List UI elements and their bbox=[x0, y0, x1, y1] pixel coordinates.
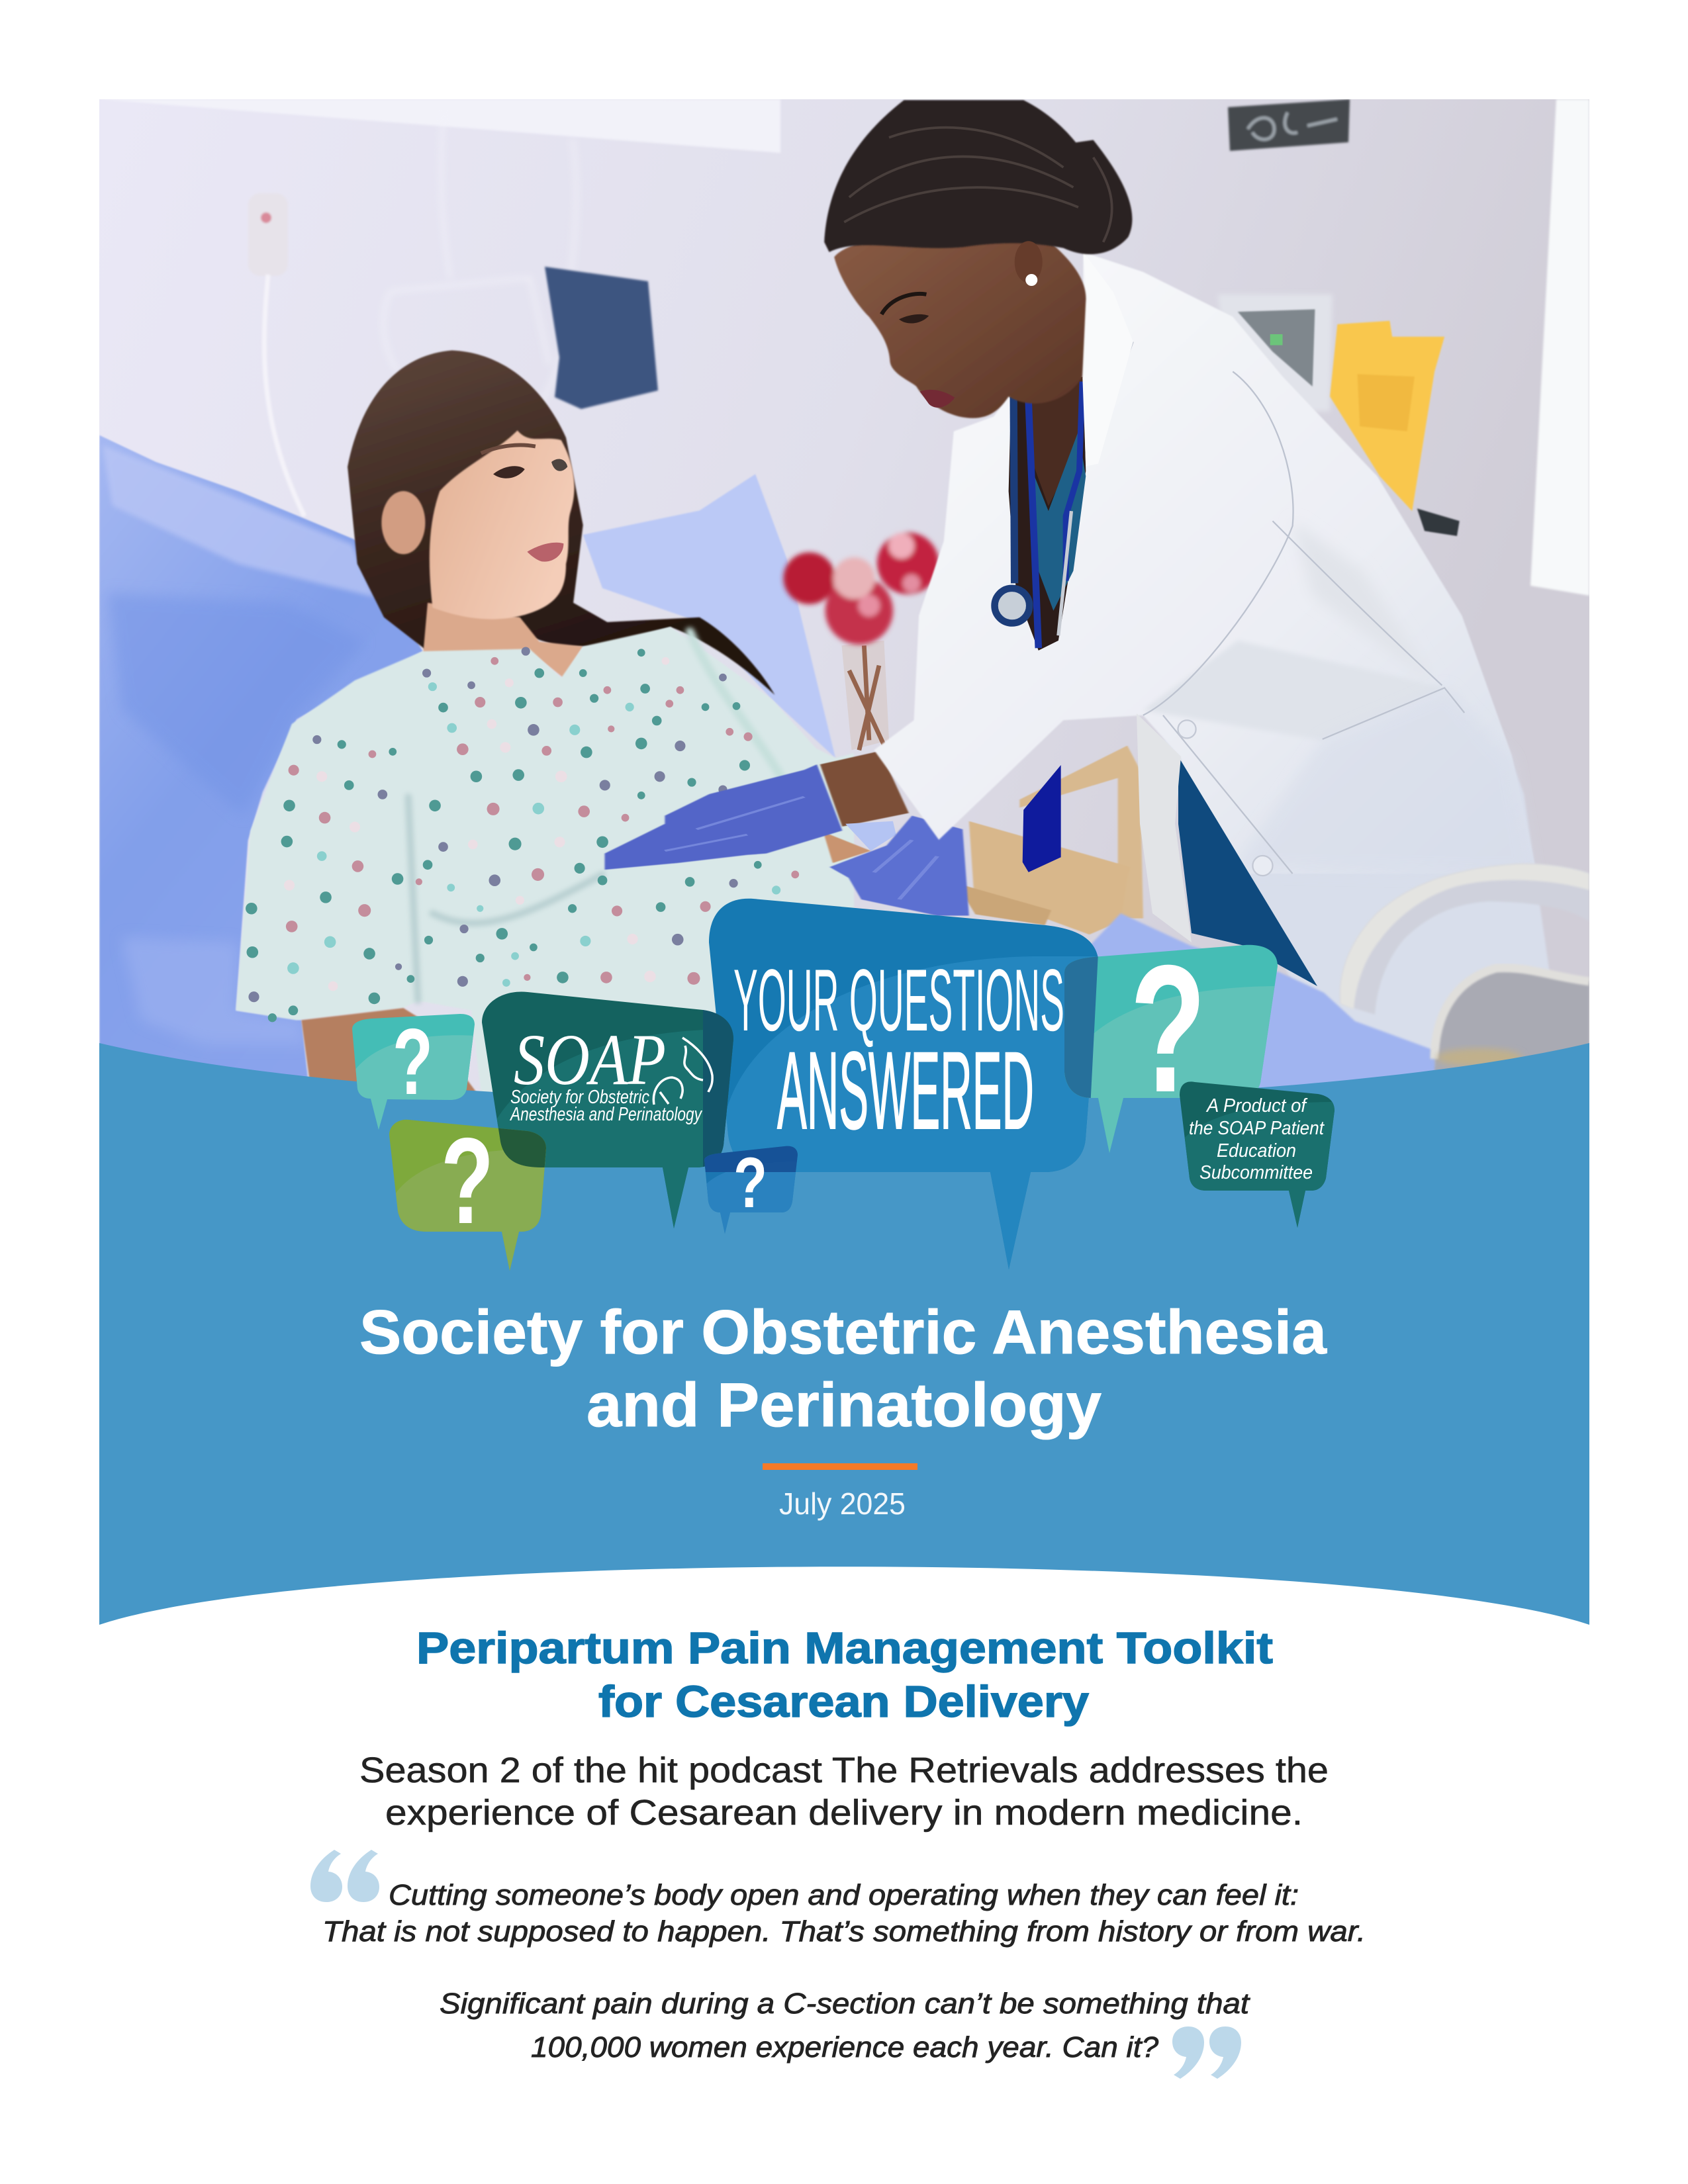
quotation: Cutting someone’s body open and operating when they can feel it: bbox=[389, 1879, 1299, 1911]
intro text: experience of Cesarean delivery in modern medicine. bbox=[385, 1793, 1303, 1833]
doctor hair braids bbox=[844, 128, 1112, 242]
right teal question bubble: ? bbox=[1130, 928, 1206, 1130]
toolkit heading: Peripartum Pain Management Toolkit bbox=[416, 1623, 1273, 1673]
SOAP mother and baby mark bbox=[653, 1038, 712, 1105]
photo glove right hand bbox=[829, 816, 969, 916]
photo large pillow bbox=[99, 435, 423, 1107]
photo call device bbox=[248, 193, 305, 516]
photo lab coat bbox=[874, 252, 1536, 874]
glove creases bbox=[665, 797, 937, 899]
orange divider bbox=[763, 1463, 917, 1470]
patient ear bbox=[381, 491, 425, 554]
photo tan cushion bbox=[1436, 1048, 1523, 1067]
photo wrist and gloves bbox=[604, 751, 969, 916]
photo inner bed pad bbox=[1434, 968, 1589, 1072]
gown shading bbox=[408, 632, 802, 1001]
SOAP wordmark: SOAP bbox=[514, 1019, 666, 1100]
photo flowers in vase bbox=[783, 533, 939, 750]
photo doctor group bbox=[824, 100, 1536, 876]
product credit bubble bbox=[1178, 1081, 1337, 1231]
photo window bbox=[1530, 99, 1589, 596]
photo blood pressure bag bbox=[545, 267, 658, 409]
photo doctor face bbox=[834, 230, 1086, 418]
SOAP logo bubble bbox=[482, 991, 741, 1231]
product credit bubble: A Product of bbox=[1205, 1095, 1308, 1116]
date: July 2025 bbox=[779, 1486, 906, 1521]
photo monitor bbox=[1218, 295, 1460, 536]
photo glove on belly bbox=[604, 764, 842, 870]
photo coat lower section bbox=[1139, 655, 1552, 1072]
photo patient hand bbox=[823, 832, 870, 863]
pillow corner highlight bbox=[122, 938, 306, 1044]
toolkit heading: for Cesarean Delivery bbox=[598, 1677, 1089, 1727]
main bubble: your questions answered: ANSWERED bbox=[777, 1030, 1034, 1152]
quotation: That is not supposed to happen. That’s something from history or from war. bbox=[322, 1915, 1366, 1948]
doctor ear and earring bbox=[1015, 241, 1043, 286]
green question bubble bbox=[389, 991, 724, 1274]
title: society name: and Perinatology bbox=[586, 1370, 1102, 1439]
small teal question bubble: ? bbox=[393, 1009, 433, 1115]
photo doctor wrist bbox=[820, 751, 909, 827]
SOAP name line 2: Anesthesia and Perinatology bbox=[509, 1104, 702, 1125]
small blue question bubble bbox=[702, 1142, 801, 1238]
blue title band bbox=[99, 1043, 1589, 1625]
doctor eye, brow and lips bbox=[882, 294, 955, 408]
lab coat buttons bbox=[1178, 720, 1272, 876]
pillow highlight bbox=[103, 445, 374, 597]
title: society name bbox=[359, 1297, 1327, 1439]
photo pale sheet under gloves bbox=[845, 821, 896, 851]
product credit bubble: Subcommittee bbox=[1199, 1162, 1313, 1183]
quotation: Significant pain during a C-section can’t be something that bbox=[440, 1987, 1250, 2020]
photo: doctor examining pregnant patient in hospital room bbox=[99, 99, 1589, 1112]
product credit bubble: the SOAP Patient bbox=[1189, 1118, 1325, 1139]
photo blue sheet bbox=[1090, 913, 1443, 1112]
lab coat collar bbox=[1082, 252, 1133, 466]
quotation bbox=[322, 1879, 1366, 2064]
photo lower pants bbox=[1178, 756, 1317, 986]
patient face bbox=[430, 430, 575, 619]
photo inner pad rim bbox=[1434, 968, 1589, 1059]
photo wall tubing bbox=[383, 113, 576, 503]
patient hair bbox=[348, 350, 774, 695]
photo bed rail highlight bbox=[1340, 864, 1589, 1009]
toolkit heading bbox=[416, 1623, 1273, 1727]
lab coat seams and pocket bbox=[1088, 341, 1464, 874]
gown dots bbox=[246, 649, 762, 1022]
photo wall clock bbox=[1228, 99, 1350, 151]
speech bubble group: YOUR QUESTIONS bbox=[733, 952, 1064, 1050]
right teal question bubble bbox=[1059, 928, 1281, 1173]
product credit bubble: Education bbox=[1217, 1140, 1296, 1161]
photo coat under-panel bbox=[1137, 713, 1192, 942]
photo wall background bbox=[99, 99, 1589, 1105]
photo wall shelf bbox=[1417, 508, 1460, 536]
pillow shadow bbox=[107, 593, 365, 816]
scrubs bbox=[1029, 432, 1086, 611]
title: society name: Society for Obstetric Anesthesia bbox=[359, 1297, 1327, 1367]
patient forearm bbox=[301, 1008, 476, 1092]
SOAP name line 1: Society for Obstetric bbox=[510, 1087, 649, 1108]
icon: closing quotation mark bbox=[1172, 2026, 1241, 2079]
photo bed sheet and rails bbox=[1090, 713, 1589, 1112]
icon: opening quotation mark bbox=[310, 1850, 379, 1902]
stethoscope and lanyard bbox=[995, 382, 1082, 648]
scrubs and neck opening bbox=[1009, 377, 1086, 651]
photo patient group bbox=[99, 350, 854, 1107]
quotation: 100,000 women experience each year. Can it? bbox=[531, 2031, 1159, 2064]
lab coat shading bbox=[1143, 641, 1447, 740]
photo table bbox=[957, 745, 1143, 934]
photo bed rail bbox=[1340, 864, 1589, 1015]
patient gown bbox=[236, 627, 854, 1092]
photo ceiling shelf bbox=[99, 99, 780, 153]
photo yellow sharps bin bbox=[1330, 321, 1444, 511]
patient neck bbox=[423, 603, 583, 678]
photo second pillow bbox=[583, 474, 835, 758]
photo ID badge bbox=[1023, 765, 1061, 872]
main bubble: your questions answered bbox=[709, 899, 1112, 1277]
small blue question bubble: ? bbox=[733, 1142, 767, 1222]
patient eyes and mouth bbox=[481, 445, 567, 562]
neck skin bbox=[1029, 377, 1084, 506]
green question bubble: ? bbox=[441, 1113, 494, 1250]
photo doctor hair bbox=[824, 100, 1132, 254]
small teal question bubble bbox=[351, 1009, 477, 1132]
intro text bbox=[359, 1751, 1329, 1833]
speech bubble group bbox=[351, 899, 1337, 1277]
intro text: Season 2 of the hit podcast The Retrievals addresses the bbox=[359, 1751, 1329, 1790]
